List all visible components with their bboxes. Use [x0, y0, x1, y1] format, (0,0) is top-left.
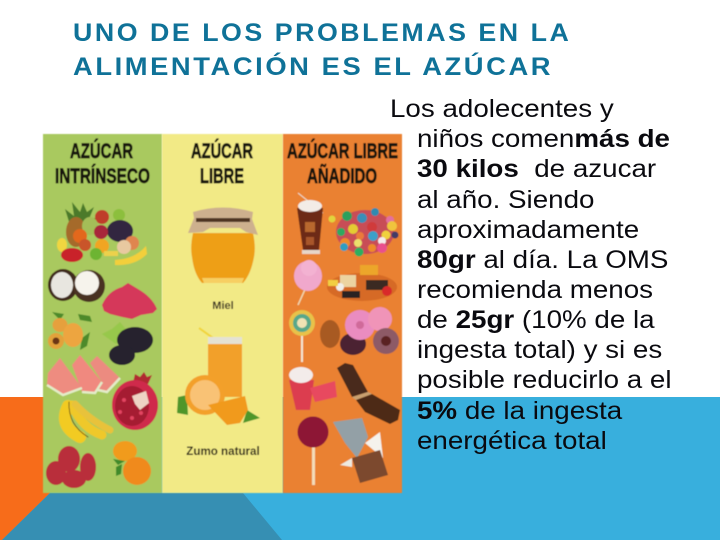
- text block: sugar intake: posible reducirlo a el: [417, 366, 672, 394]
- icon: spiral lollipop: [289, 310, 315, 362]
- icon: chocolate bar: [337, 363, 400, 424]
- icon: strawberries: [46, 446, 96, 488]
- icon: red lollipop: [298, 416, 328, 485]
- panel: azúcar libre: [162, 134, 283, 493]
- text block: sugar intake: 5% de la ingesta: [417, 396, 622, 424]
- panel: azúcar intrínseco: [43, 134, 162, 493]
- background: orange wedge: [0, 397, 60, 540]
- icon: coconut: [48, 269, 105, 302]
- text block: sugar intake: al año. Siendo: [417, 186, 594, 214]
- heading: azúcar intrínseco: INTRÍNSECO: [55, 165, 150, 188]
- title: UNO DE LOS PROBLEMAS EN LA: [73, 19, 571, 47]
- text block: sugar intake: niños comenmás de: [417, 125, 670, 153]
- text block: sugar intake: 30 kilos de azucar: [417, 155, 656, 183]
- text block: sugar intake: aproximadamente: [417, 216, 639, 244]
- heading: azúcar libre añadido: [287, 139, 398, 188]
- heading: azúcar libre añadido: AÑADIDO: [307, 165, 377, 188]
- heading: azúcar intrínseco: AZÚCAR: [70, 139, 133, 163]
- icon: cotton candy: [294, 260, 322, 305]
- text block: sugar intake: ingesta total) y si es: [417, 336, 662, 364]
- icon: watermelon: [47, 355, 120, 395]
- heading: azúcar libre: AZÚCAR: [191, 139, 253, 163]
- label: miel: Miel: [212, 300, 234, 312]
- background: bright blue band: [0, 397, 720, 540]
- icon: oranges: [113, 441, 151, 485]
- icon: raspberries: [102, 283, 157, 319]
- label: zumo natural: Zumo natural: [186, 445, 260, 458]
- icon: sweets pile: [327, 265, 397, 301]
- text block: sugar intake: recomienda menos: [417, 276, 653, 304]
- icon: apricots: [48, 312, 92, 350]
- heading: azúcar libre: [191, 139, 253, 188]
- icon: wrapped chocolate: [333, 418, 388, 483]
- text block: sugar intake: 80gr al día. La OMS: [417, 246, 668, 274]
- icon: fruit pile: [57, 202, 147, 265]
- icon: orange juice: [177, 328, 260, 425]
- icon: cola glass: [297, 193, 323, 254]
- icon: donuts: [320, 307, 399, 355]
- text block: sugar intake: [390, 95, 672, 455]
- icon: blackberries: [102, 322, 153, 365]
- text block: sugar intake: de 25gr (10% de la: [417, 306, 655, 334]
- heading: azúcar libre: LIBRE: [200, 165, 244, 188]
- icon: honey jar: [188, 208, 258, 283]
- panel: azúcar libre añadido: [283, 134, 402, 493]
- icon: candy balls: [328, 208, 398, 256]
- icon: pomegranate: [112, 372, 158, 430]
- title: ALIMENTACIÓN ES EL AZÚCAR: [73, 53, 553, 81]
- icon: bananas: [65, 402, 110, 437]
- text block: sugar intake: Los adolecentes y: [390, 95, 614, 123]
- text block: sugar intake: energética total: [417, 427, 607, 455]
- icon: jelly desserts: [289, 367, 337, 410]
- background: dark blue trapezoid: [2, 493, 282, 540]
- heading: azúcar intrínseco: [55, 139, 150, 188]
- heading: azúcar libre añadido: AZÚCAR LIBRE: [287, 139, 398, 163]
- title: [73, 19, 571, 81]
